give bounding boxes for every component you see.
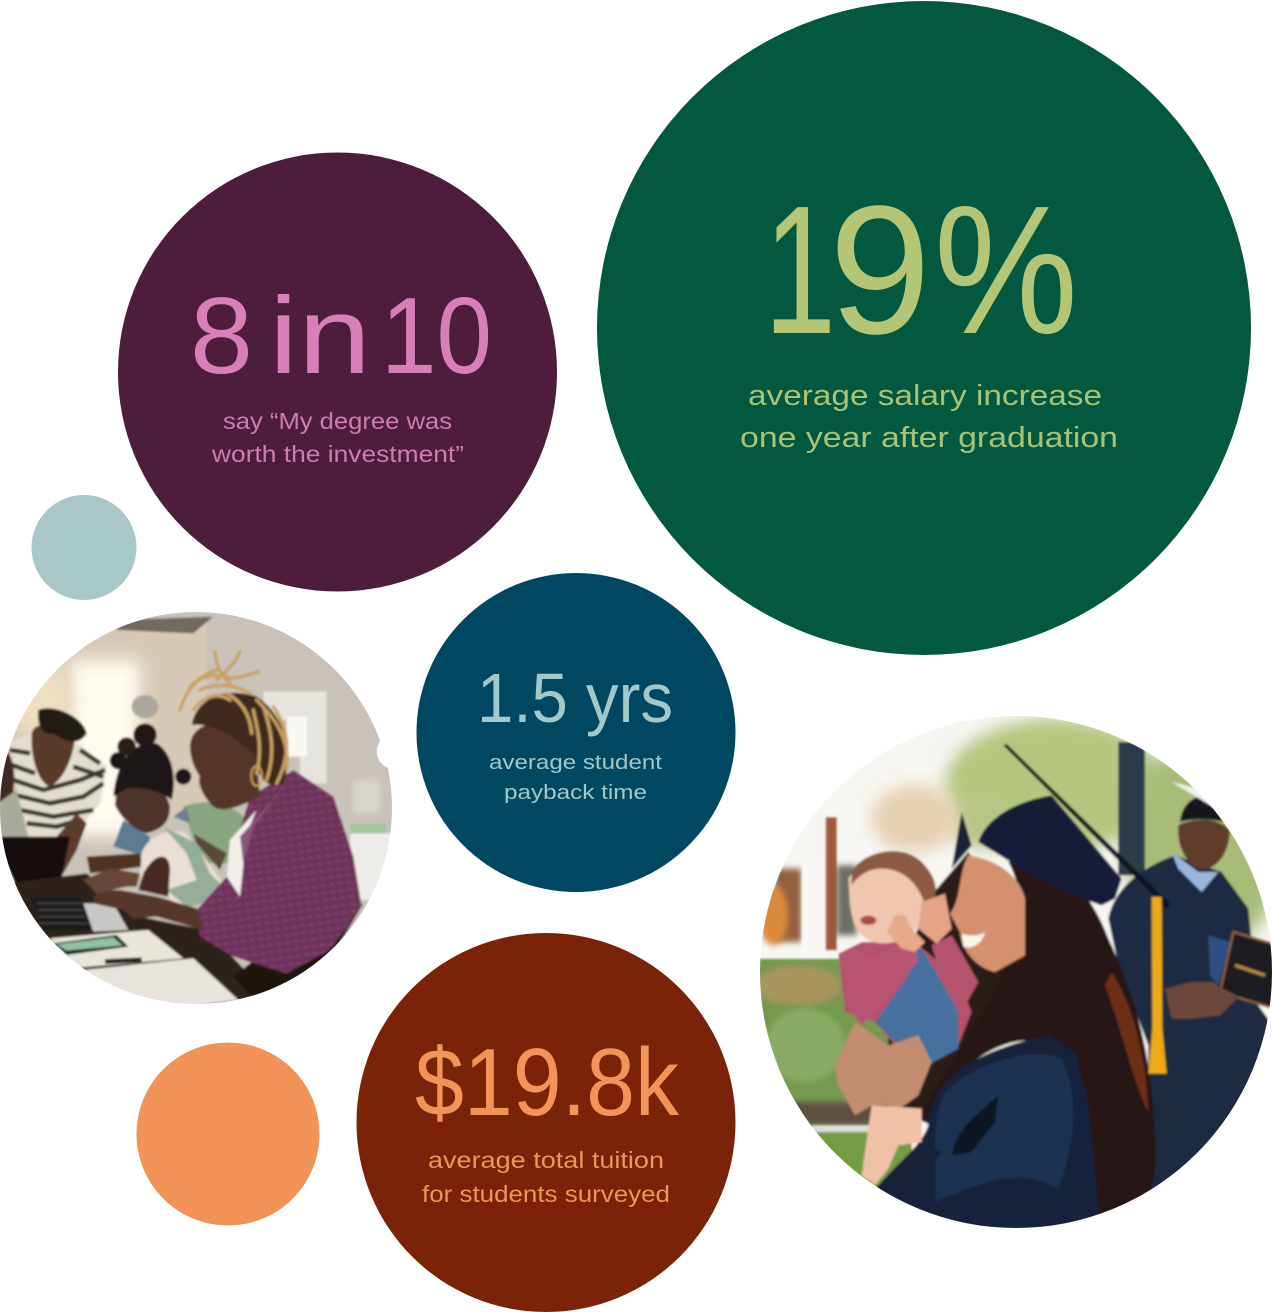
graduate face (950, 855, 1025, 972)
photo: graduate holding a baby (748, 705, 1272, 1239)
stat circle: 19% salary increase (597, 1, 1251, 655)
stat circle: 8 in 10 (118, 152, 557, 592)
stat circle: 1.5 yrs (416, 573, 736, 892)
stat number: 8 in 10: 10 (381, 275, 492, 397)
stat number: $19.8k: $19.8k (415, 1029, 680, 1136)
man in striped shirt (0, 708, 107, 873)
stat number: 19%: % (934, 167, 1078, 372)
caption: average student payback time: payback time (504, 781, 647, 804)
decorative orange circle (136, 1042, 320, 1226)
caption: worth the investment: worth the investment” (211, 441, 464, 467)
woman in purple cardigan (83, 652, 363, 1010)
photo: family working at a laptop (0, 603, 411, 1013)
graduate hands (835, 1022, 932, 1115)
stat number: 1.5 yrs: 1.5 yrs (477, 659, 673, 737)
decorative teal circle (32, 495, 136, 600)
stat circle: $19.8k tuition (356, 933, 736, 1312)
baby in pink and denim (838, 851, 978, 1069)
stat number: 19%: 9 (829, 167, 931, 372)
caption: average total tuition: average total tuition (428, 1147, 664, 1173)
stat number: 8 in 10: 8 (190, 275, 253, 397)
caption: average total tuition: for students surveyed (422, 1181, 670, 1207)
baby legs (862, 1105, 922, 1185)
dark hair fill behind the baby (887, 851, 1009, 1125)
caption: average salary increase: average salary increase (748, 380, 1102, 412)
toddler with pigtails (83, 723, 233, 907)
background graduate (1108, 782, 1272, 1232)
long dark hair (972, 860, 1156, 1214)
stat number: 8 in 10: in (269, 275, 371, 397)
graduate gown (877, 1035, 1102, 1239)
caption: average student payback time: average student (489, 751, 662, 774)
stat number: 19%: 1 (764, 167, 836, 372)
counter, laptop, phone and notebook (2, 835, 253, 1004)
mortarboard with tassel (978, 744, 1170, 1074)
caption: average salary increase: one year after graduation (740, 422, 1118, 454)
caption: worth the investment: say “My degree was (223, 408, 452, 434)
